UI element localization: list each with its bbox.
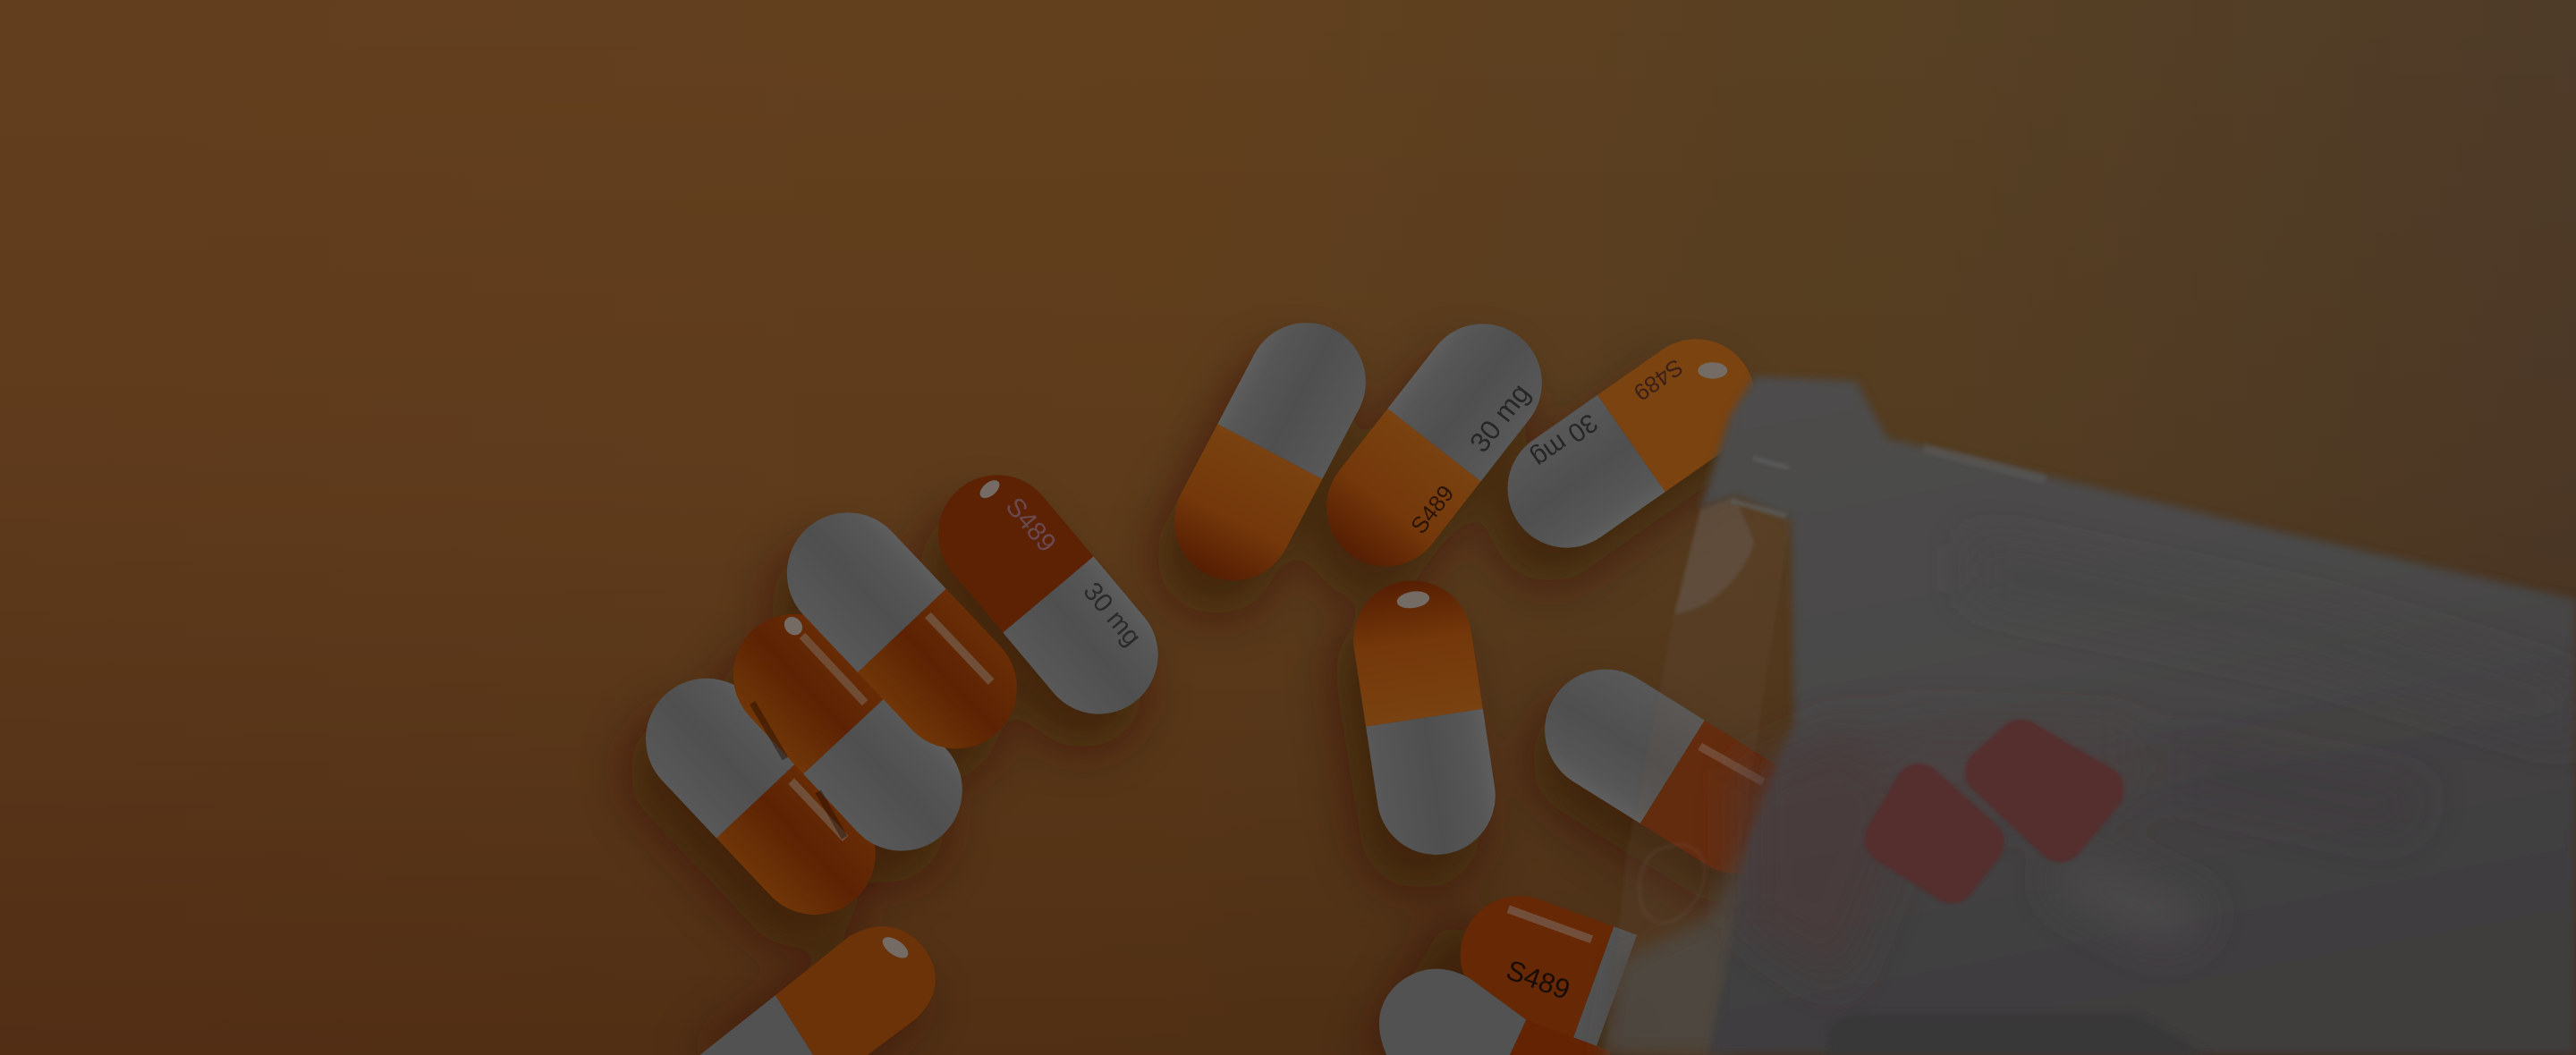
bag: creases and ridge highlights (1732, 448, 2046, 516)
capsule text: S489: S489 (1406, 481, 1459, 539)
translucent bag flap (1605, 496, 1791, 1055)
capsule 8: upright centre (1345, 572, 1504, 863)
capsule text: S489: S489 (1629, 354, 1687, 405)
capsule 5: top centre (1154, 302, 1386, 601)
pharmacy bag body with top flap (1700, 376, 2576, 1055)
capsule 3: upper of the middle pair (762, 487, 1042, 773)
bag: shaded folds and highlights (1741, 542, 2576, 985)
capsule 2: lower of the middle pair (708, 589, 987, 876)
capsule 12: bottom centre, cropped by the frame (1379, 969, 1610, 1055)
capsule 10: bottom left, cropped by the frame (699, 926, 936, 1055)
capsule 7: top right labelled S489 and 30 mg (1485, 316, 1778, 571)
capsule text: 30 mg: 30 mg (1526, 408, 1603, 473)
soft lighter strip along the lower bag opening (1602, 722, 1794, 1055)
capsule 9: entering the bag (1521, 646, 1823, 898)
bag: red logo, two rounded marks (1889, 744, 2099, 879)
capsule text: 30 mg: 30 mg (1463, 377, 1536, 458)
capsule text: 30 mg: 30 mg (1078, 577, 1147, 652)
capsule text: S489: S489 (1502, 954, 1574, 1006)
bag: dark opening at the bottom (1826, 1015, 2209, 1055)
capsule text: S489: S489 (1000, 492, 1062, 558)
capsule cast shadows (605, 331, 1810, 1054)
capsule 6: top centre labelled 30 mg and S489 (1302, 300, 1566, 590)
printed marking between the lower capsules (752, 703, 844, 838)
capsule 11: bottom centre labelled S489 (1444, 880, 1637, 1046)
capsule 1: far left (621, 654, 901, 940)
capsule 4: labelled 30 mg (914, 451, 1182, 738)
